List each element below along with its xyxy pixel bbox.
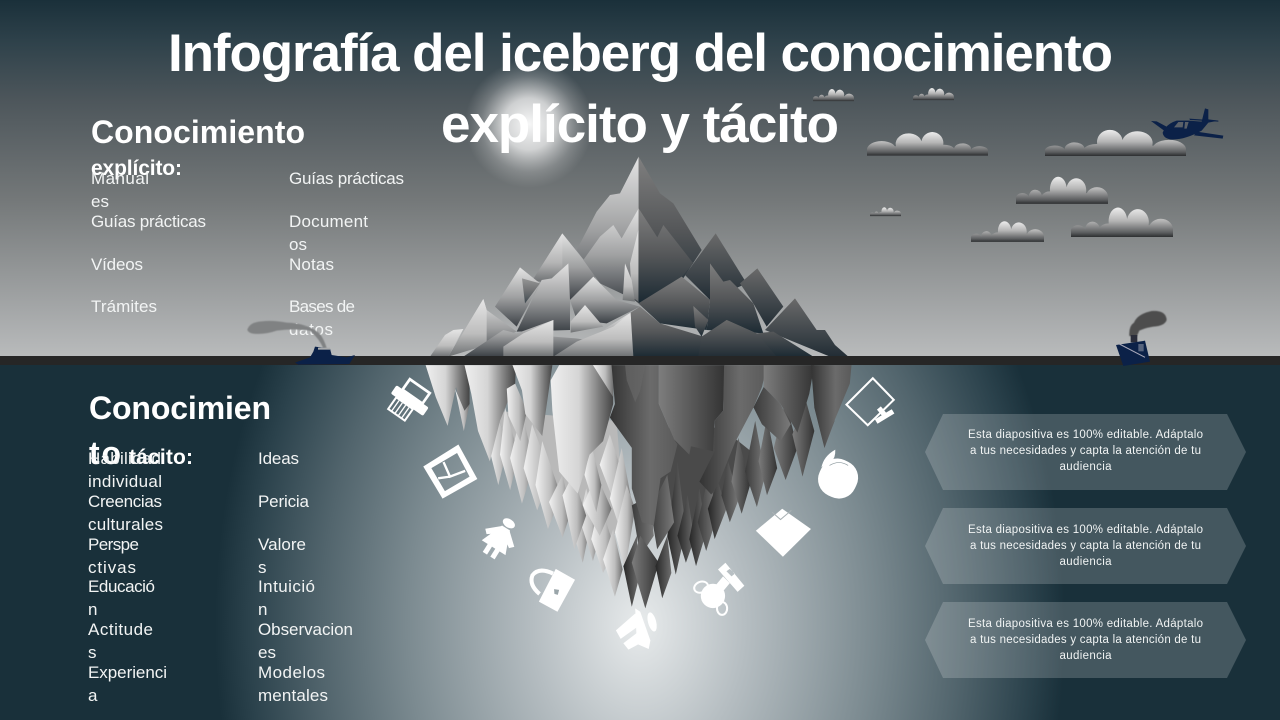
callout 2: audiencia <box>1060 556 1112 568</box>
sky background <box>0 0 1280 357</box>
list: tacit knowledge items: a <box>88 686 98 705</box>
heading: tacit knowledge: tácito: <box>129 446 193 469</box>
list: tacit knowledge items: Modelos <box>258 663 325 682</box>
panel: tacit knowledge <box>88 390 353 705</box>
list: tacit knowledge items: culturales <box>88 515 163 534</box>
list: explicit knowledge items: Notas <box>289 255 334 274</box>
list: explicit knowledge items: Guías prácticas <box>91 212 206 231</box>
icon: shirt <box>756 509 811 557</box>
list: explicit knowledge items: Trámites <box>91 297 157 316</box>
list: explicit knowledge items: Bases de <box>289 297 355 316</box>
icon: trophy <box>693 563 744 615</box>
callout 3: a tus necesidades y capta la atención de tu <box>970 634 1201 646</box>
list: tacit knowledge items: Experienci <box>88 663 167 682</box>
panel: explicit knowledge <box>91 114 404 339</box>
callout 3: audiencia <box>1060 650 1112 662</box>
heading: tacit knowledge <box>89 390 271 471</box>
list: tacit knowledge items: Perspe <box>88 535 139 554</box>
sun <box>465 60 593 188</box>
callout 3 <box>925 602 1246 678</box>
list: explicit knowledge items: Vídeos <box>91 255 143 274</box>
list: tacit knowledge items: Pericia <box>258 492 310 511</box>
title: explícito y tácito <box>441 95 839 154</box>
icon: apple <box>812 450 864 504</box>
list: tacit knowledge items: Ideas <box>258 449 299 468</box>
list: explicit knowledge items <box>91 169 404 339</box>
icon: padlock <box>531 569 575 612</box>
horizon band <box>0 356 1280 365</box>
icon: man <box>616 608 659 650</box>
list: tacit knowledge items: Valore <box>258 535 306 554</box>
list: tacit knowledge items: es <box>258 643 276 662</box>
list: tacit knowledge items: s <box>258 558 266 577</box>
callout 2: a tus necesidades y capta la atención de tu <box>970 540 1201 552</box>
list: explicit knowledge items: datos <box>289 320 333 339</box>
callout 1: Esta diapositiva es 100% editable. Adáptalo <box>968 429 1203 441</box>
icon: check box <box>423 444 477 499</box>
list: tacit knowledge items: n <box>258 600 267 619</box>
heading: tacit knowledge: to <box>89 435 121 471</box>
icons around the iceberg <box>383 375 894 650</box>
list: tacit knowledge items: Observacion <box>258 620 353 639</box>
list: tacit knowledge items: mentales <box>258 686 328 705</box>
sea background <box>0 365 1280 720</box>
list: tacit knowledge items: n <box>88 600 97 619</box>
callout 3: Esta diapositiva es 100% editable. Adáptalo <box>968 618 1203 630</box>
callout 2 <box>925 508 1246 584</box>
icon: boat with smoke <box>247 321 355 365</box>
heading: explicit knowledge: explícito: <box>91 157 182 180</box>
callout 1 <box>925 414 1246 490</box>
list: tacit knowledge items: Habilidad <box>88 449 161 468</box>
icon: monitor <box>846 378 894 425</box>
list: tacit knowledge items: Intuició <box>258 577 315 596</box>
list: tacit knowledge items: Actitude <box>88 620 153 639</box>
list: explicit knowledge items: es <box>91 192 109 211</box>
iceberg below water <box>426 365 852 608</box>
list: explicit knowledge items: Guías prácticas <box>289 169 404 188</box>
iceberg above water <box>430 157 848 357</box>
callout 1: audiencia <box>1060 461 1112 473</box>
list: explicit knowledge items: Manual <box>91 169 149 188</box>
list: tacit knowledge items: Educació <box>88 577 155 596</box>
list: tacit knowledge items: ctivas <box>88 558 136 577</box>
icon: printer <box>383 375 436 428</box>
callout 1: a tus necesidades y capta la atención de tu <box>970 445 1201 457</box>
list: tacit knowledge items: s <box>88 643 96 662</box>
clouds <box>813 88 1186 242</box>
list: tacit knowledge items: Creencias <box>88 492 162 511</box>
list: explicit knowledge items: os <box>289 235 307 254</box>
icon: steamship with smoke <box>1116 311 1167 366</box>
title: Infografía del iceberg del conocimiento <box>168 24 1113 83</box>
title <box>168 24 1113 154</box>
list: explicit knowledge items: Document <box>289 212 368 231</box>
icon: airplane <box>1151 108 1223 139</box>
heading: explicit knowledge <box>91 114 305 180</box>
heading: tacit knowledge: Conocimien <box>89 390 271 426</box>
list: tacit knowledge items: individual <box>88 472 162 491</box>
list: tacit knowledge items <box>88 449 353 705</box>
callout 2: Esta diapositiva es 100% editable. Adáptalo <box>968 524 1203 536</box>
heading: explicit knowledge: Conocimiento <box>91 114 305 150</box>
icon: woman <box>474 511 526 565</box>
